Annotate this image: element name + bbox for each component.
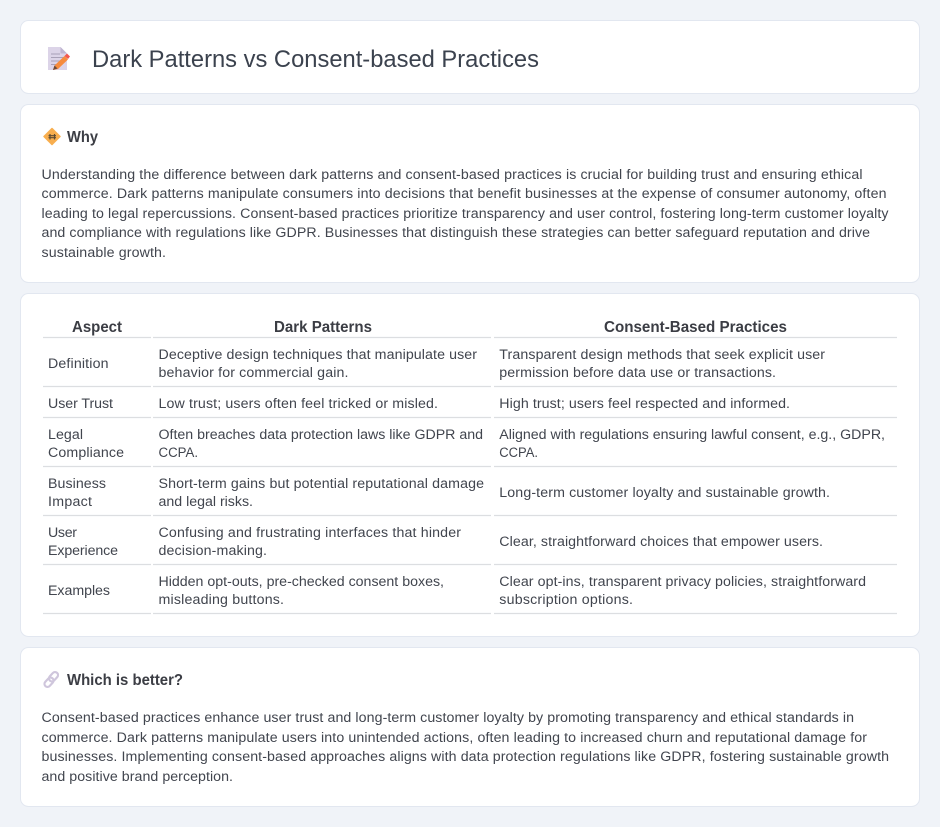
row: business impact: Short-term gains but potential reputational damage [158, 476, 484, 492]
row: business impact: Long-term customer loyalty and sustainable growth. [499, 485, 830, 501]
text block: why explanation: and compliance with regulations like GDPR. Businesses that distinguish these strategies can better safeguard reputation and drive [42, 225, 870, 241]
title: Dark Patterns vs Consent-based Practices [92, 46, 539, 73]
row: user trust: High trust; users feel respected and informed. [499, 396, 790, 412]
text block: verdict: and positive brand perception. [42, 769, 233, 785]
row: legal compliance: CCPA. [158, 445, 198, 461]
row: definition: Transparent design methods that seek explicit user [499, 347, 825, 363]
row: business impact: Impact [48, 494, 92, 510]
row: user experience: User [48, 525, 77, 541]
row: user experience: Clear, straightforward choices that empower users. [499, 534, 823, 550]
text block: verdict: businesses. Implementing consent-based approaches aligns with data protection regulations like GDPR, fostering sustainable growth [42, 749, 889, 765]
row: legal compliance: Compliance [48, 445, 124, 461]
row: user experience: Confusing and frustrating interfaces that hinder [158, 525, 461, 541]
row: business impact [48, 476, 830, 510]
panel: which is better [20, 648, 920, 806]
row: legal compliance: Legal [48, 427, 83, 443]
row: user experience: decision-making. [158, 543, 267, 559]
table header row: Consent-Based Practices [604, 319, 787, 336]
text block: why explanation: sustainable growth. [42, 245, 166, 261]
icon: document with pencil [48, 47, 70, 70]
text block: verdict: Consent-based practices enhance user trust and long-term customer loyalty by promoting transparency and ethical standards in [42, 710, 854, 726]
row: user trust: Low trust; users often feel tricked or misled. [158, 396, 438, 412]
icon: construction diamond [44, 128, 60, 144]
text block: why explanation: leading to legal repercussions. Consent-based practices prioritize transparency and user control, fostering long-term customer loyalty [42, 206, 889, 222]
row: user experience: Experience [48, 543, 118, 559]
table header row: Aspect [72, 319, 123, 336]
panel: header [20, 20, 920, 94]
text block: why explanation: commerce. Dark patterns manipulate consumers into decisions that benefit businesses at the expense of consumer autonomy, often [42, 186, 886, 202]
text block: why explanation: Understanding the difference between dark patterns and consent-based practices is crucial for building trust and ensuring ethical [42, 167, 862, 183]
table header row [72, 319, 787, 336]
row: definition: permission before data use or transactions. [499, 365, 776, 381]
row: examples: subscription options. [499, 592, 633, 608]
row: examples [48, 574, 866, 608]
row: legal compliance: Aligned with regulations ensuring lawful consent, e.g., GDPR, [499, 427, 885, 443]
row: examples: Examples [48, 583, 110, 599]
row: user trust [48, 396, 790, 412]
row: definition [48, 347, 825, 381]
table header row: Dark Patterns [274, 319, 372, 336]
row: legal compliance: Often breaches data protection laws like GDPR and [158, 427, 483, 443]
row: definition: behavior for commercial gain. [158, 365, 348, 381]
row: examples: Hidden opt-outs, pre-checked consent boxes, [158, 574, 444, 590]
panel: why [20, 104, 920, 282]
icon: link [43, 671, 59, 688]
row: business impact: Business [48, 476, 106, 492]
text block: verdict [42, 710, 889, 785]
row: examples: Clear opt-ins, transparent privacy policies, straightforward [499, 574, 866, 590]
text block: why explanation [42, 167, 889, 261]
row: legal compliance [48, 427, 885, 461]
row: legal compliance: CCPA. [499, 445, 538, 461]
row: user trust: User Trust [48, 396, 113, 412]
row: definition: Definition [48, 356, 108, 372]
heading: which is better: Which is better? [67, 672, 183, 689]
heading: why: Why [67, 129, 98, 146]
row: business impact: and legal risks. [158, 494, 253, 510]
row: user experience [48, 525, 823, 559]
row: examples: misleading buttons. [158, 592, 284, 608]
table row rules [43, 338, 897, 614]
text block: verdict: commerce. Dark patterns manipulate users into unintended actions, often leading to increased churn and reputational damage for [42, 730, 867, 746]
row: definition: Deceptive design techniques that manipulate user [158, 347, 477, 363]
panel: comparison table [20, 294, 920, 636]
